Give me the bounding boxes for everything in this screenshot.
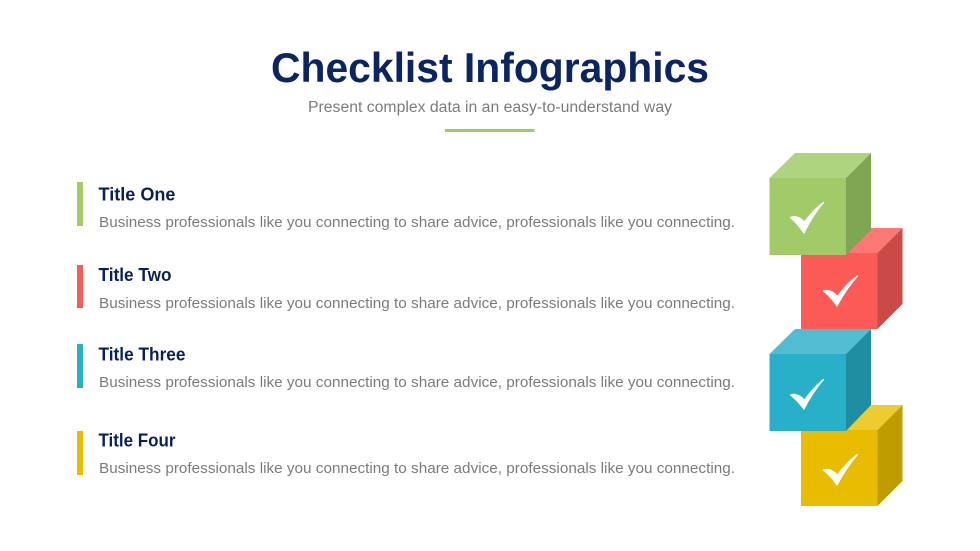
accent bar: yellow bbox=[77, 431, 83, 475]
description: title two: Business professionals like you connecting to share advice, professionals like you connecting. bbox=[99, 296, 735, 312]
cube: yellow bbox=[801, 405, 902, 506]
title: Checklist Infographics bbox=[271, 44, 709, 91]
heading: title two: Title Two bbox=[98, 264, 172, 285]
item: title two bbox=[77, 264, 735, 312]
item: title one bbox=[77, 182, 735, 231]
description: title three: Business professionals like you connecting to share advice, professionals like you connecting. bbox=[99, 375, 735, 391]
description: title four: Business professionals like you connecting to share advice, professionals like you connecting. bbox=[99, 461, 735, 477]
subtitle: Present complex data in an easy-to-understand way bbox=[308, 99, 672, 116]
cube: green bbox=[770, 153, 871, 255]
accent bar: green bbox=[77, 182, 83, 226]
accent bar: teal bbox=[77, 344, 83, 388]
description: title one: Business professionals like you connecting to share advice, professionals like you connecting. bbox=[99, 215, 735, 231]
item: title three bbox=[77, 344, 735, 391]
heading: title four: Title Four bbox=[98, 430, 176, 450]
cube: teal bbox=[770, 329, 871, 431]
heading: title one: Title One bbox=[98, 184, 176, 204]
heading underline bbox=[445, 129, 534, 132]
cube: red bbox=[801, 228, 902, 329]
heading: title three: Title Three bbox=[98, 344, 186, 364]
accent bar: red bbox=[77, 265, 83, 308]
item: title four bbox=[77, 430, 735, 477]
